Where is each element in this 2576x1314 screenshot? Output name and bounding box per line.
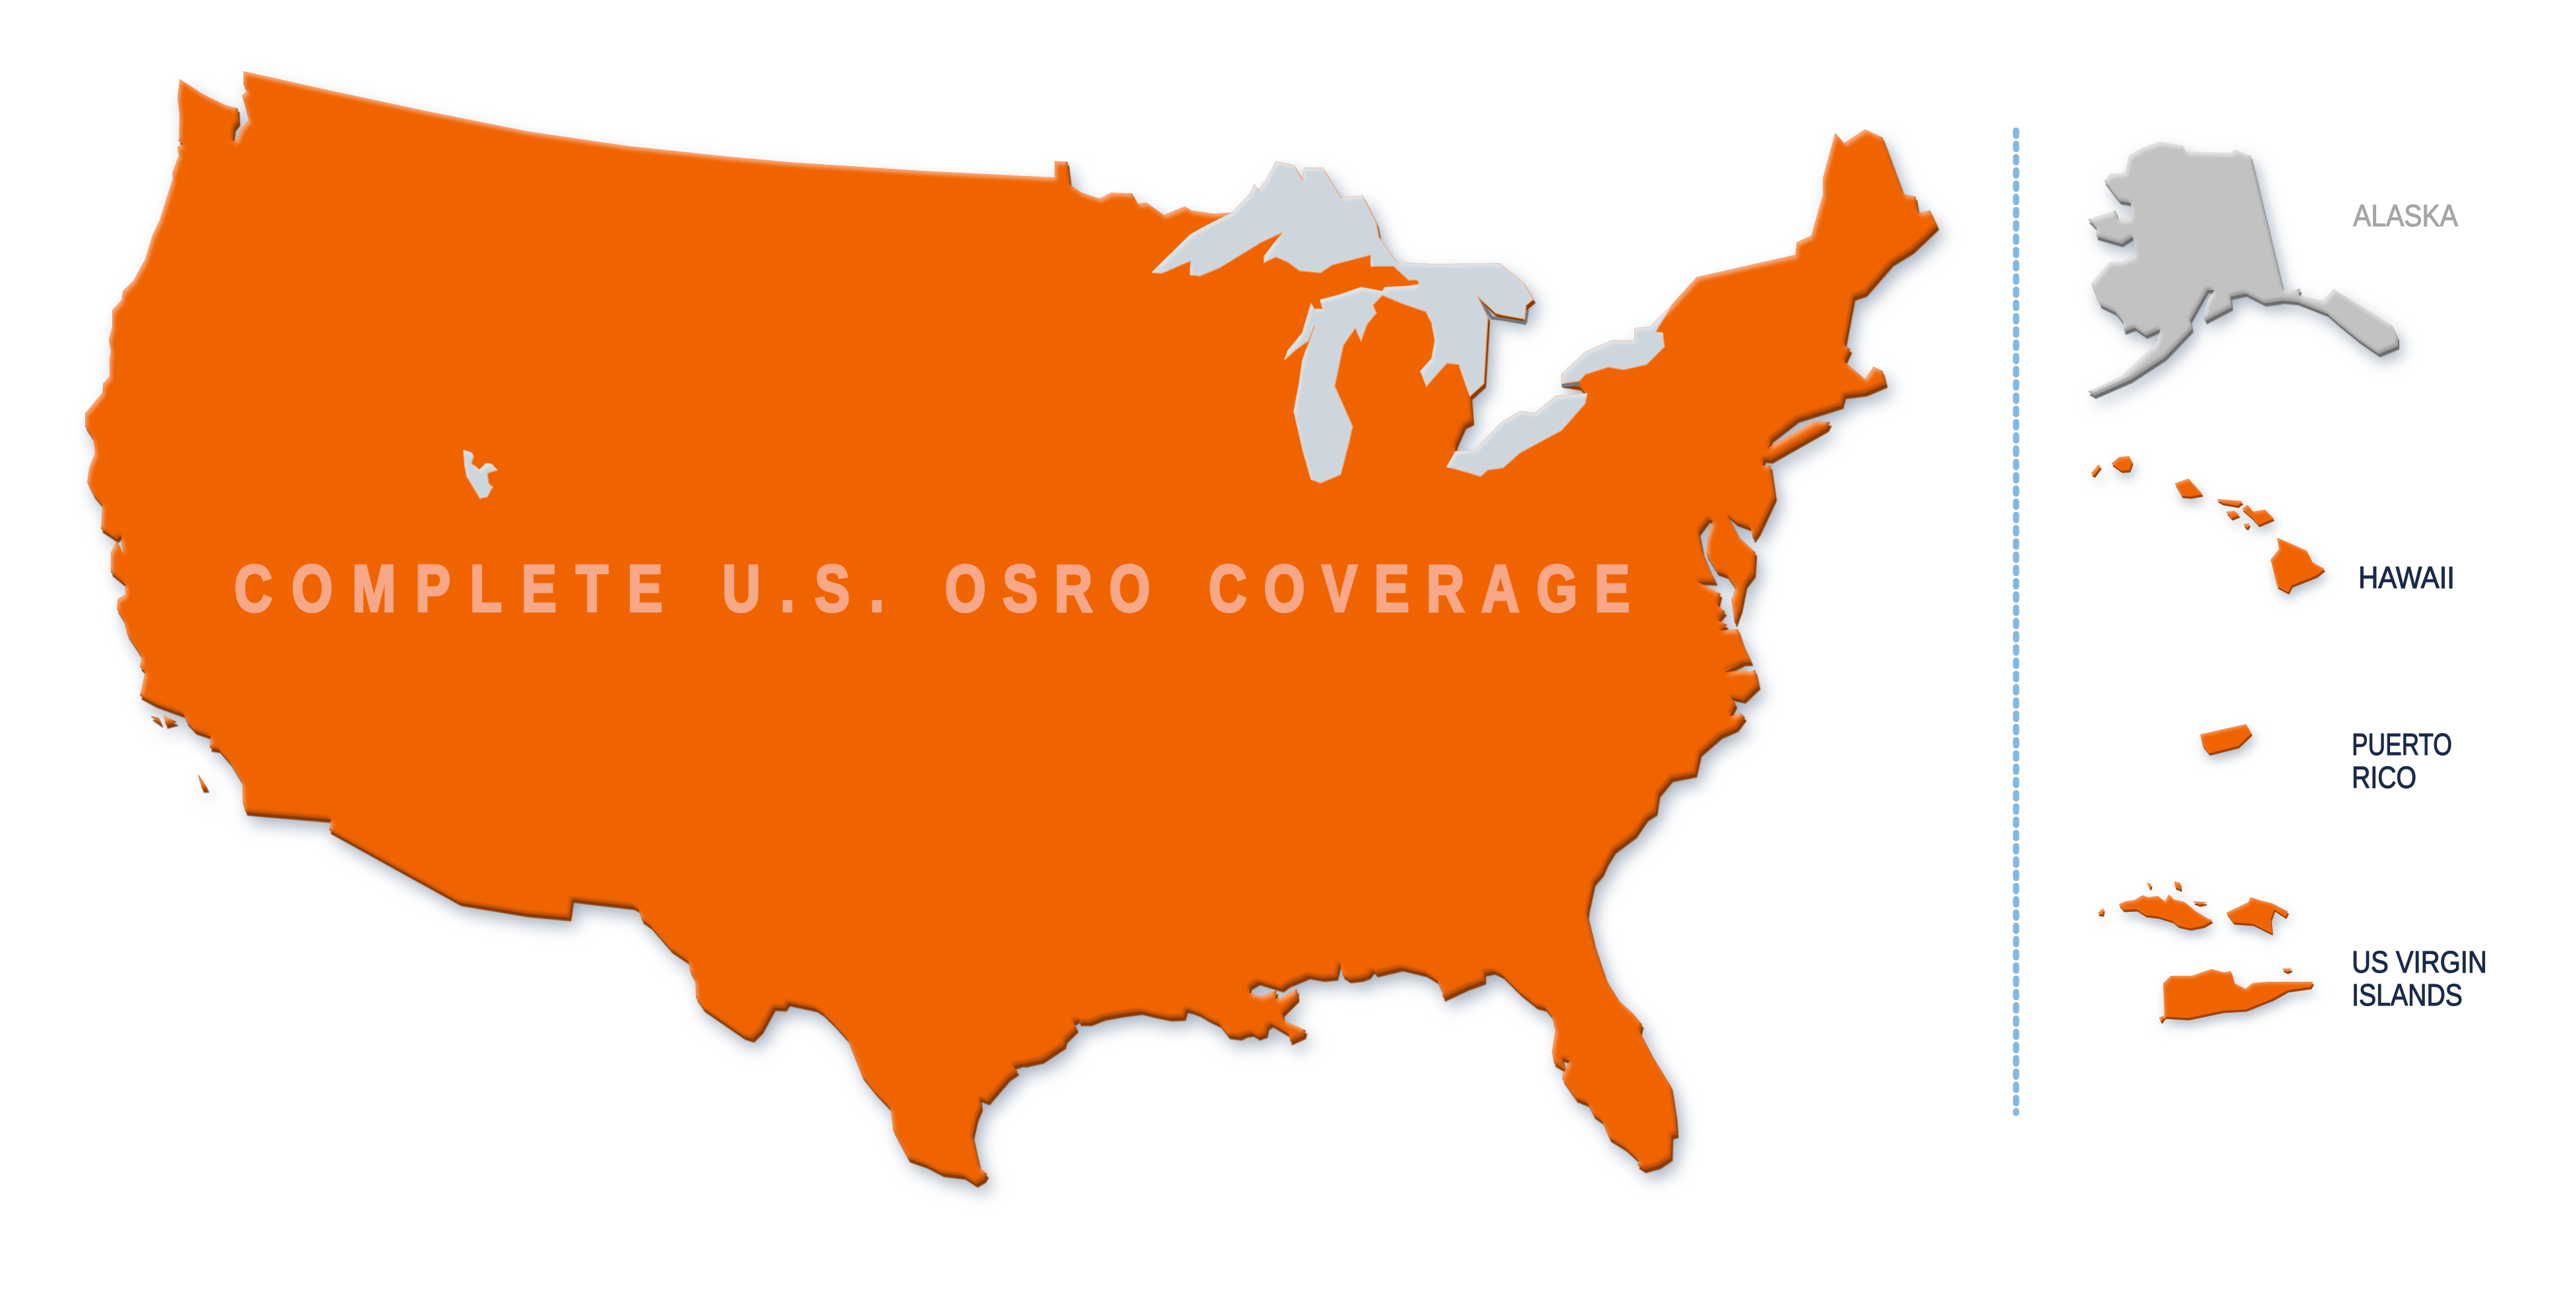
title text: complete U.S. OSRO coverage: COVERAGE: [1209, 552, 1630, 626]
Lake Ontario: [1562, 307, 1671, 384]
panel: territories: [2088, 142, 2398, 1021]
Great Salt Lake: [464, 450, 497, 498]
title text: complete U.S. OSRO coverage: U.S.: [722, 552, 884, 626]
label: US Virgin Islands: [2352, 945, 2487, 1012]
map: US Virgin Islands: [2099, 882, 2312, 1021]
title text: complete U.S. OSRO coverage: [234, 552, 1630, 626]
map: Hawaii: [2092, 457, 2323, 591]
label: Alaska: ALASKA: [2353, 198, 2458, 233]
labels: territories: [2352, 198, 2487, 1012]
title text: complete U.S. OSRO coverage: COMPLETE: [234, 552, 663, 626]
mainland silhouette: [86, 72, 1937, 1183]
title text: complete U.S. OSRO coverage: OSRO: [945, 552, 1150, 626]
Long Island: [1762, 421, 1829, 460]
label: Puerto Rico: PUERTO: [2352, 727, 2452, 762]
Lakes Superior, Michigan and Huron: [1152, 162, 1533, 483]
Channel Islands: [152, 716, 207, 789]
map: contiguous United States: [86, 72, 1937, 1183]
map: Puerto Rico: [2201, 725, 2250, 752]
label: US Virgin Islands: US VIRGIN: [2352, 945, 2487, 979]
label: Hawaii: HAWAII: [2358, 560, 2455, 595]
map: Alaska: [2088, 142, 2398, 396]
Great Lakes: [464, 162, 1671, 498]
label: US Virgin Islands: ISLANDS: [2352, 978, 2463, 1012]
label: Puerto Rico: RICO: [2352, 760, 2416, 794]
dotted divider: [2013, 131, 2019, 1113]
Great Lakes shaded edges: [1479, 299, 1579, 386]
label: Puerto Rico: [2352, 727, 2452, 794]
Lake Erie: [1447, 394, 1587, 477]
